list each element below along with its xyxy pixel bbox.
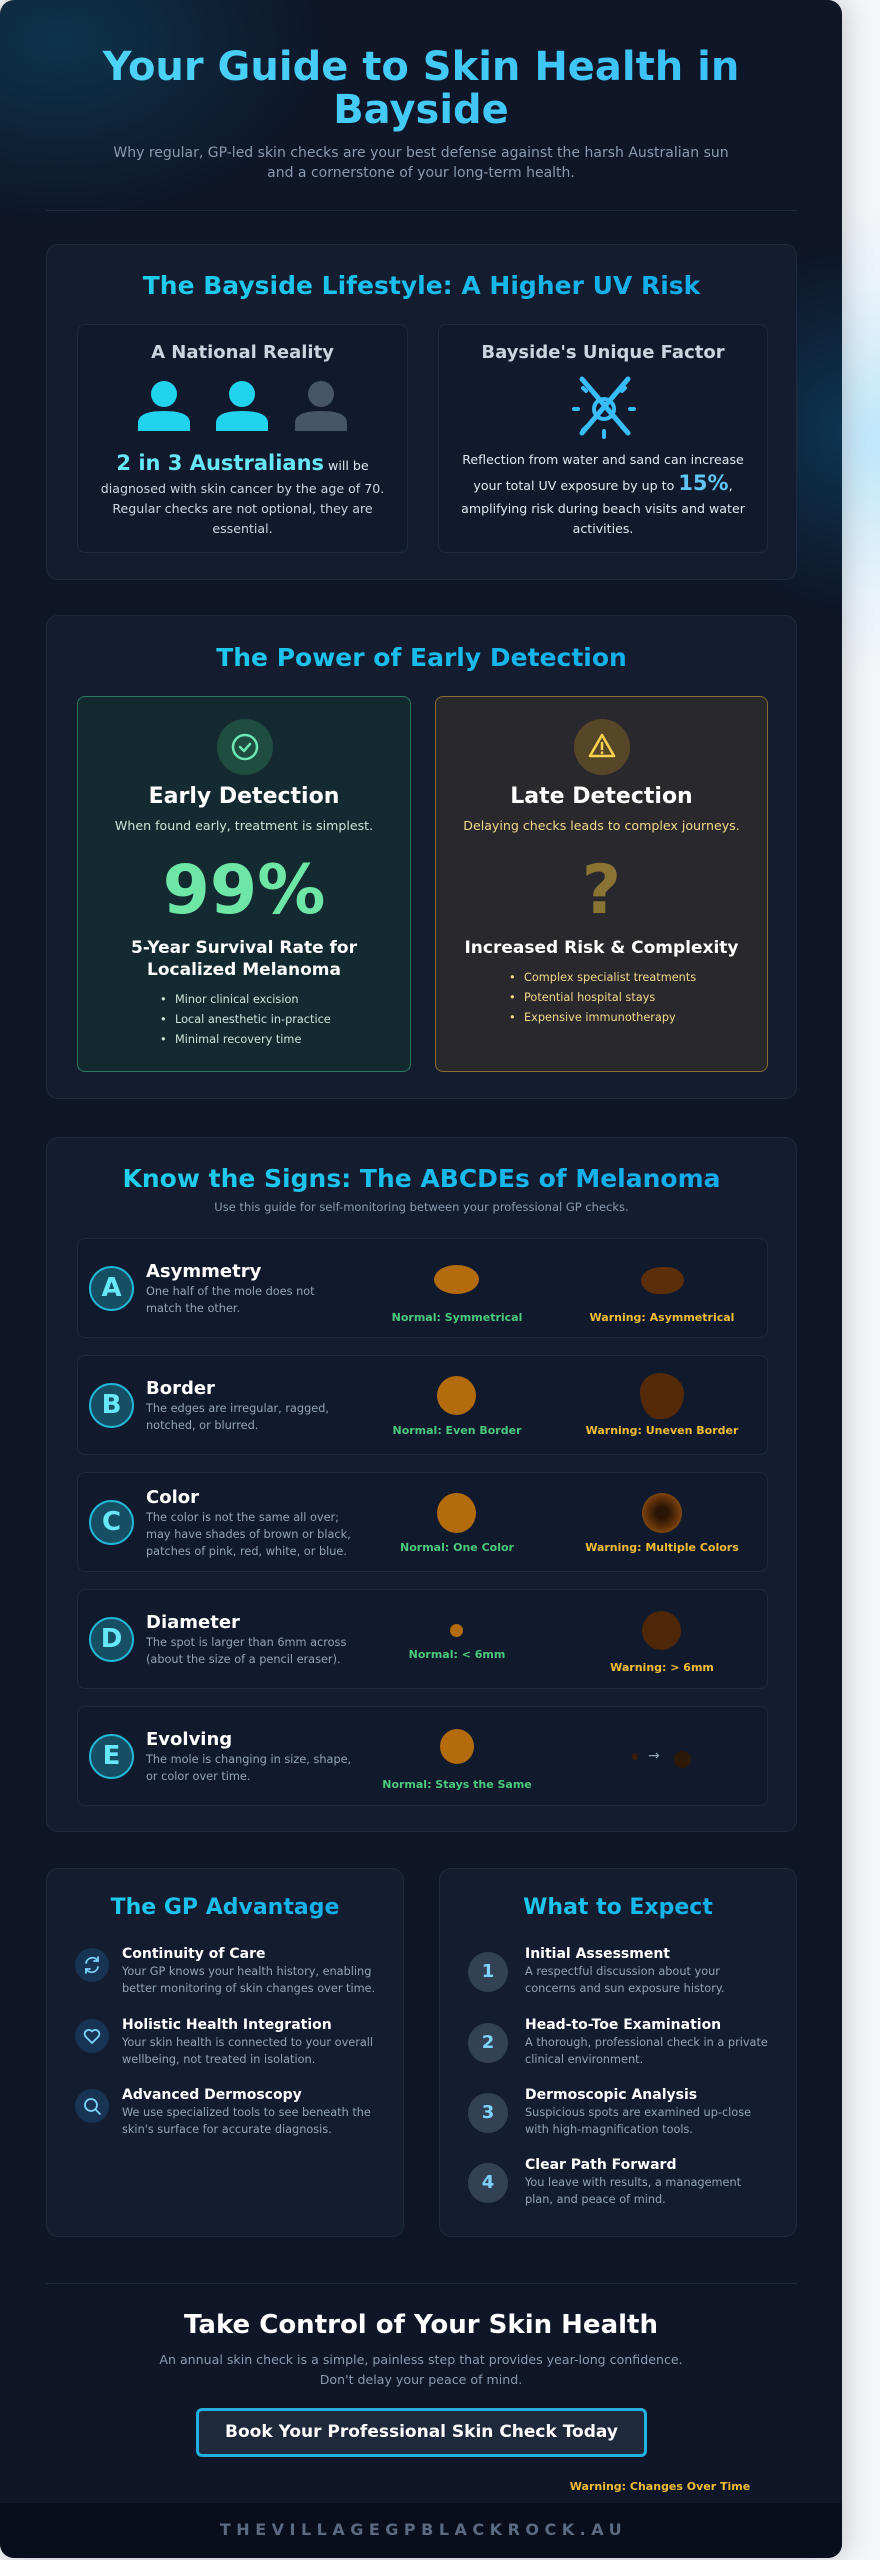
CTA text: An annual skin check is a simple, painless step that provides year-long confidence. — [159, 2352, 683, 2367]
subtext: When found early, treatment is simplest. — [115, 818, 373, 833]
step 3: Dermoscopic Analysis — [525, 2087, 697, 2103]
card: early detection: • — [160, 1013, 167, 1026]
subtitle: Why regular, GP-led skin checks are your best defense against the harsh Australian sun and a cornerstone of your long-term health. — [113, 145, 729, 181]
row D: D — [101, 1624, 122, 1654]
heading — [47, 1895, 403, 1921]
step 4: Clear Path Forward — [525, 2157, 676, 2173]
uv text: your total UV exposure by up to 15%, — [473, 471, 733, 495]
heading: Early Detection — [149, 784, 339, 809]
panel: what to expect — [439, 1868, 797, 2237]
row A: match the other. — [146, 1302, 240, 1315]
icon: check — [217, 719, 273, 775]
row A: A — [101, 1273, 122, 1303]
row B: B — [102, 1390, 121, 1420]
row C: Color — [146, 1486, 199, 1508]
subheading: A National Reality — [151, 342, 334, 363]
stat text: diagnosed with skin cancer by the age of 70. — [101, 481, 384, 496]
step 1: concerns and sun exposure history. — [525, 1982, 725, 1995]
stat label — [131, 938, 357, 980]
card: early detection: Minimal recovery time — [175, 1033, 301, 1046]
step 1: A respectful discussion about your — [525, 1965, 720, 1978]
row D: Diameter — [146, 1612, 240, 1633]
card: early detection: • — [160, 1033, 167, 1046]
item: dermoscopy: We use specialized tools to see beneath the — [122, 2106, 371, 2119]
row A: Normal: Symmetrical — [392, 1311, 522, 1324]
evolving warning visual: → — [648, 1748, 660, 1764]
step 1 — [468, 1946, 725, 1995]
bullet list — [509, 971, 696, 1024]
button — [196, 2408, 647, 2457]
card: late detection: • — [509, 991, 516, 1004]
title: Bayside — [333, 87, 509, 133]
row D: Warning: > 6mm — [610, 1661, 714, 1674]
step 2: clinical environment. — [525, 2053, 643, 2066]
panel: GP advantage — [46, 1868, 404, 2237]
row E: or color over time. — [146, 1770, 250, 1783]
step 3: 3 — [482, 2102, 494, 2123]
heading: Late Detection — [510, 784, 693, 809]
step 3 — [468, 2087, 751, 2136]
row B: Normal: Even Border — [392, 1424, 522, 1437]
item: dermoscopy: Advanced Dermoscopy — [122, 2087, 302, 2103]
item: dermoscopy: skin's surface for accurate diagnosis. — [122, 2123, 332, 2136]
row B: Warning: Uneven Border — [586, 1424, 738, 1437]
row A: Asymmetry — [146, 1261, 261, 1282]
stat text: 2 in 3 Australians will be — [116, 451, 369, 475]
row E: Evolving — [146, 1729, 232, 1750]
card: late detection: Expensive immunotherapy — [524, 1011, 676, 1024]
subtext: Delaying checks leads to complex journeys. — [463, 818, 740, 833]
card: late detection: Complex specialist treatments — [524, 971, 696, 984]
row D — [77, 1589, 768, 1689]
bullet list — [160, 993, 331, 1046]
heading: What to Expect — [523, 1895, 713, 1920]
subtitle: Use this guide for self-monitoring between your professional GP checks. — [214, 1200, 629, 1214]
footer: THEVILLAGEGPBLACKROCK.AU — [220, 2520, 627, 2539]
step 2: A thorough, professional check in a private — [525, 2036, 768, 2049]
CTA heading: Take Control of Your Skin Health — [184, 2310, 658, 2340]
row D: The spot is larger than 6mm across — [146, 1636, 346, 1649]
stat text — [101, 451, 384, 536]
question mark: ? — [582, 851, 621, 930]
uv text: Reflection from water and sand can increase — [462, 452, 744, 467]
row B: Border — [146, 1378, 215, 1399]
row E — [77, 1706, 768, 1806]
stat text: essential. — [212, 521, 273, 536]
row C: The color is not the same all over; — [146, 1510, 339, 1524]
button: Book Your Professional Skin Check Today — [225, 2422, 618, 2442]
row C — [77, 1472, 768, 1572]
card: early detection: • — [160, 993, 167, 1006]
row D: (about the size of a pencil eraser). — [146, 1653, 341, 1666]
item: continuity: Continuity of Care — [122, 1946, 265, 1962]
stat label: Localized Melanoma — [147, 960, 341, 980]
step 4 — [468, 2157, 741, 2206]
row B: notched, or blurred. — [146, 1419, 258, 1432]
panel: bayside lifestyle — [46, 244, 797, 580]
uv text: amplifying risk during beach visits and water — [461, 501, 745, 516]
heading: The GP Advantage — [111, 1895, 339, 1920]
heading — [47, 643, 796, 673]
heading — [440, 1895, 796, 1921]
heading: The Bayside Lifestyle: A Higher UV Risk — [143, 271, 700, 300]
row A: One half of the mole does not — [146, 1285, 315, 1298]
item: holistic: wellbeing, not treated in isolation. — [122, 2053, 315, 2066]
stat 99%: 99% — [163, 851, 325, 930]
icon: people — [138, 381, 347, 431]
CTA text: Don't delay your peace of mind. — [320, 2372, 522, 2387]
heading: The Power of Early Detection — [216, 643, 627, 672]
row C: may have shades of brown or black, — [146, 1528, 351, 1540]
subheading: Bayside's Unique Factor — [481, 342, 725, 363]
card: early detection: Local anesthetic in-practice — [175, 1013, 331, 1026]
row B: The edges are irregular, ragged, — [146, 1402, 329, 1415]
stat text: Regular checks are not optional, they are — [112, 501, 373, 516]
uv text: activities. — [573, 521, 633, 536]
CTA text — [159, 2352, 683, 2387]
card: late detection: • — [509, 971, 516, 984]
step 4: plan, and peace of mind. — [525, 2193, 666, 2206]
row C: Warning: Multiple Colors — [585, 1541, 739, 1554]
step 3: with high-magnification tools. — [525, 2123, 693, 2136]
card: late detection: Potential hospital stays — [524, 991, 655, 1004]
item: continuity: Your GP knows your health history, enabling — [122, 1965, 371, 1978]
row C: Normal: One Color — [400, 1541, 514, 1554]
subcard: unique factor — [438, 324, 768, 553]
step 1: 1 — [482, 1961, 494, 1982]
stat label: 5-Year Survival Rate for — [131, 938, 357, 958]
card: early detection — [77, 696, 411, 1072]
row E: The mole is changing in size, shape, — [146, 1753, 351, 1766]
title — [0, 46, 842, 132]
item: continuity: better monitoring of skin changes over time. — [122, 1982, 375, 1995]
row C: C — [102, 1507, 121, 1537]
footer — [0, 2503, 842, 2558]
row E: Normal: Stays the Same — [382, 1778, 532, 1791]
row C: patches of pink, red, white, or blue. — [146, 1544, 347, 1558]
item: holistic — [75, 2017, 373, 2066]
uv text — [461, 452, 745, 536]
heading: Know the Signs: The ABCDEs of Melanoma — [122, 1164, 720, 1193]
item: dermoscopy — [75, 2087, 371, 2136]
panel: ABCDE — [46, 1137, 797, 1832]
step 2 — [468, 2017, 768, 2066]
step 3: Suspicious spots are examined up-close — [525, 2106, 751, 2119]
step 2: Head-to-Toe Examination — [525, 2017, 721, 2033]
icon: warning — [574, 719, 630, 775]
row A: Warning: Asymmetrical — [590, 1311, 734, 1324]
step 4: 4 — [482, 2172, 494, 2193]
card: early detection: Minor clinical excision — [175, 993, 299, 1006]
subcard: national reality — [77, 324, 408, 553]
card: late detection — [435, 696, 768, 1072]
row E: E — [103, 1741, 120, 1771]
evolving warning visual — [632, 1748, 691, 1768]
row B — [77, 1355, 768, 1455]
step 2: 2 — [482, 2032, 494, 2053]
row D: Normal: < 6mm — [409, 1648, 505, 1661]
warning label: Warning: Changes Over Time — [570, 2480, 750, 2493]
card: late detection: • — [509, 1011, 516, 1024]
row A — [77, 1238, 768, 1338]
step 1: Initial Assessment — [525, 1946, 670, 1962]
stat label: Increased Risk & Complexity — [464, 938, 739, 958]
item: holistic: Your skin health is connected to your overall — [122, 2036, 373, 2049]
item: continuity — [75, 1946, 375, 1995]
icon: sun crossed — [572, 376, 636, 439]
title: Your Guide to Skin Health in — [103, 44, 739, 90]
step 4: You leave with results, a management — [525, 2176, 741, 2189]
item: holistic: Holistic Health Integration — [122, 2017, 332, 2033]
panel: early detection — [46, 615, 797, 1099]
